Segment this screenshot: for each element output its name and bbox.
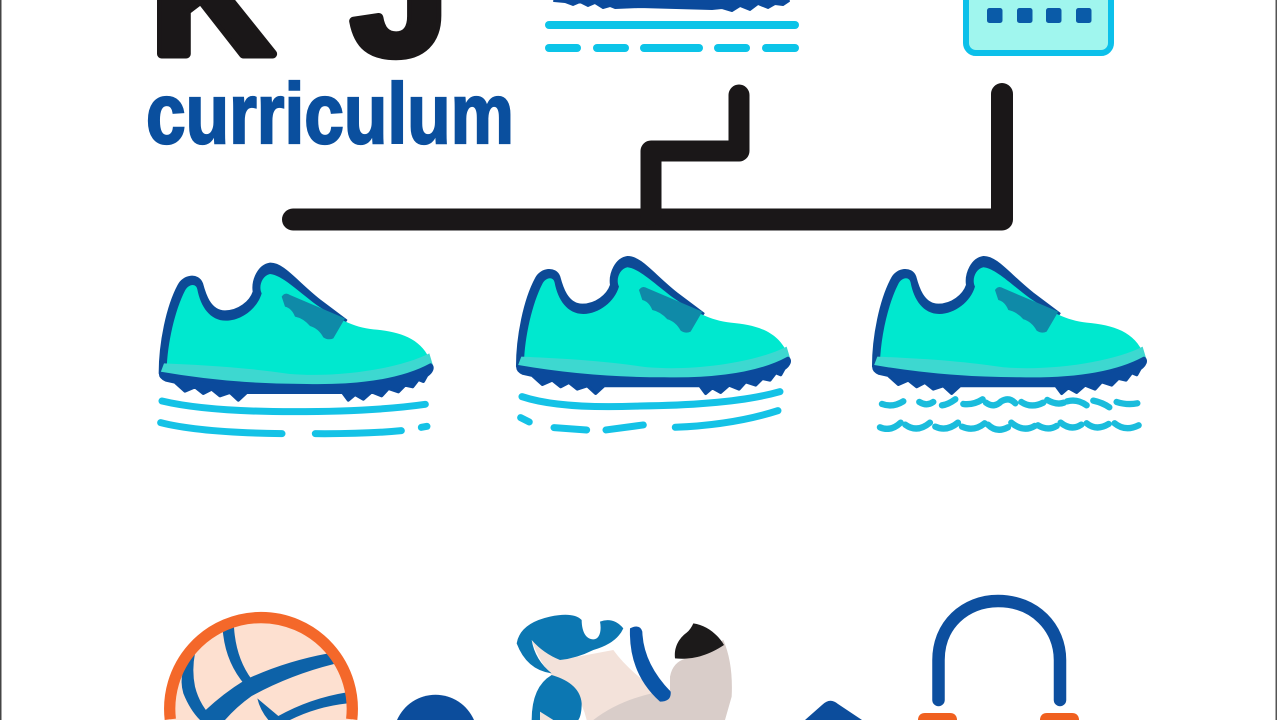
- right frame edge: [1276, 0, 1277, 720]
- connector lines joining the top icons to the three shoes: [293, 94, 1002, 220]
- icon: cropped keypad panel: [966, 0, 1111, 53]
- icon: dark blue ball (cropped): [397, 695, 474, 720]
- subtitle: curriculum: curriculum: [146, 67, 514, 162]
- icon: shoe on straight lines: [159, 263, 433, 434]
- icon: ball (cropped): [170, 618, 352, 720]
- icon: jump rope: [918, 601, 1079, 720]
- icon: shoe on wavy water lines: [873, 257, 1147, 430]
- icon: shoe on curved lines: [517, 257, 791, 430]
- icon: blue diamond shape (cropped): [805, 701, 862, 720]
- icon: top shoe sole (cropped) with ground lines: [545, 1, 799, 52]
- icon: figure in motion (cropped): [517, 615, 732, 720]
- left frame edge: [0, 0, 2, 720]
- title: large cropped letters: [150, 0, 449, 92]
